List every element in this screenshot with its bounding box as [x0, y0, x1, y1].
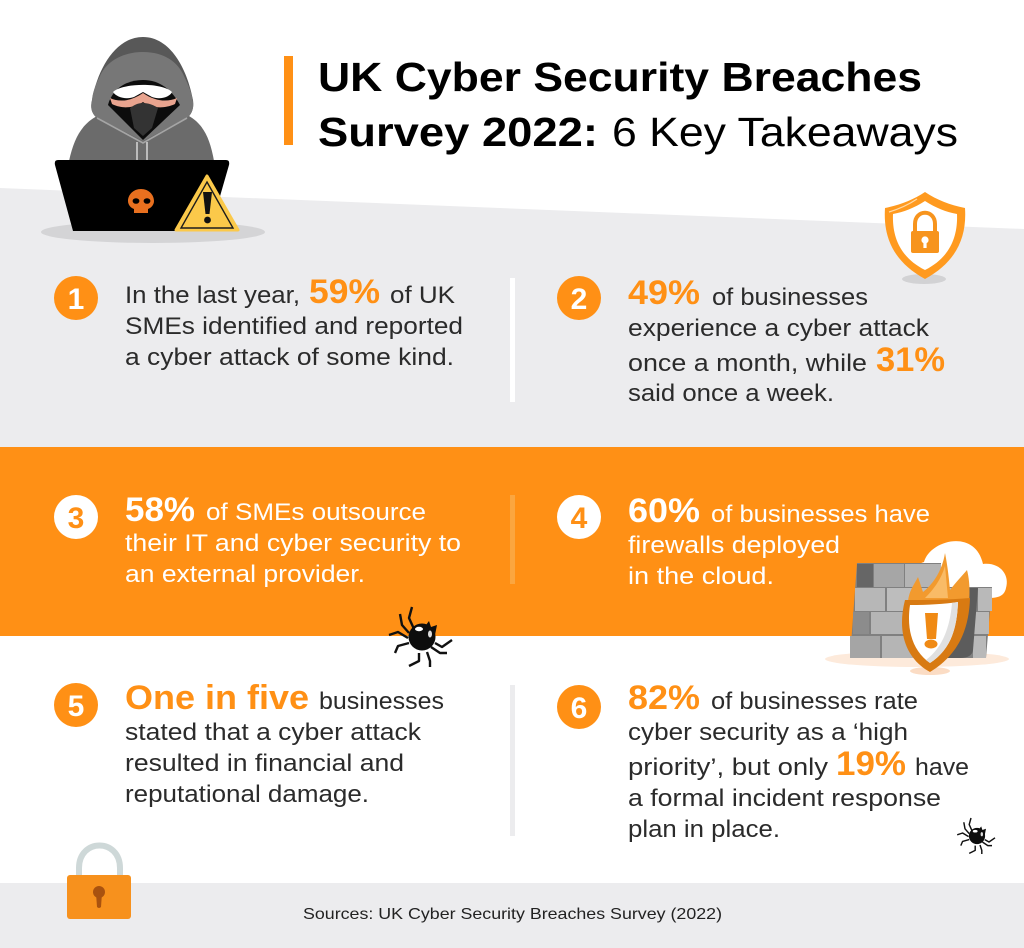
text: takeaway 6: cyber security as a ‘high: [628, 719, 908, 746]
text: takeaway 5: reputational damage.: [125, 781, 369, 808]
text: takeaway 1: a cyber attack of some kind.: [125, 344, 454, 371]
text: takeaway 4: in the cloud.: [628, 563, 774, 590]
source note: Sources: UK Cyber Security Breaches Survey (2022): [303, 906, 722, 923]
number badge 3: [54, 495, 98, 539]
text: takeaway 6: of businesses rate: [711, 688, 918, 715]
background: slanted grey band: [0, 188, 1024, 448]
number badge 2: 2: [571, 283, 587, 316]
text: takeaway 4: firewalls deployed: [628, 532, 840, 559]
text: takeaway 5: businesses: [319, 688, 444, 715]
text: takeaway 5: [125, 679, 444, 808]
number badge 4: [557, 495, 601, 539]
number badge 1: 1: [68, 283, 84, 316]
text: takeaway 2: [628, 274, 945, 407]
text: takeaway 2: experience a cyber attack: [628, 315, 930, 342]
title accent bar: [284, 56, 293, 145]
text: takeaway 4: [628, 492, 930, 590]
text: takeaway 2: 31%: [876, 341, 945, 379]
number badge 4: 4: [571, 502, 588, 535]
text: takeaway 3: [125, 491, 461, 588]
text: takeaway 3: 58%: [125, 491, 195, 529]
text: takeaway 6: 19%: [836, 745, 906, 783]
text: takeaway 6: [628, 679, 969, 843]
text: takeaway 5: One in five: [125, 679, 309, 717]
divider: panels 3 and 4: [510, 495, 515, 584]
icon: padlock: [67, 846, 131, 919]
text: takeaway 2: once a month, while: [628, 350, 867, 377]
panel: takeaway 2: [557, 274, 945, 407]
number badge 1: [54, 276, 98, 320]
text: takeaway 2: 49%: [628, 274, 700, 312]
text: takeaway 4: of businesses have: [711, 501, 930, 528]
text: takeaway 5: stated that a cyber attack: [125, 719, 422, 746]
number badge 5: 5: [68, 690, 84, 723]
text: takeaway 1: SMEs identified and reported: [125, 313, 463, 340]
number badge 5: [54, 683, 98, 727]
text: takeaway 6: priority’, but only: [628, 754, 828, 781]
text: takeaway 5: resulted in financial and: [125, 750, 404, 777]
background: orange band: [0, 447, 1024, 636]
divider: panels 5 and 6: [510, 685, 515, 836]
text: takeaway 3: an external provider.: [125, 561, 365, 588]
text: takeaway 6: have: [915, 754, 969, 781]
text: takeaway 1: In the last year,: [125, 282, 300, 309]
text: takeaway 3: their IT and cyber security to: [125, 530, 461, 557]
text: takeaway 3: of SMEs outsource: [206, 499, 426, 526]
background: footer band: [0, 883, 1024, 948]
panel: takeaway 3: [54, 491, 461, 588]
text: takeaway 6: a formal incident response: [628, 785, 941, 812]
title: UK Cyber Security Breaches: [318, 54, 922, 100]
text: takeaway 6: plan in place.: [628, 816, 780, 843]
number badge 3: 3: [68, 502, 84, 535]
title: [318, 54, 958, 155]
text: takeaway 1: of UK: [390, 282, 455, 309]
icon: hacker at laptop with warning sign: [41, 37, 265, 243]
text: takeaway 4: 60%: [628, 492, 700, 530]
text: takeaway 1: [125, 273, 463, 371]
text: takeaway 2: said once a week.: [628, 380, 834, 407]
text: takeaway 6: 82%: [628, 679, 700, 717]
icon: firewall with cloud and burning shield: [825, 541, 1009, 675]
text: takeaway 1: 59%: [309, 273, 380, 311]
icon: shield with padlock: [885, 192, 965, 284]
panel: takeaway 5: [54, 679, 444, 808]
number badge 6: 6: [571, 692, 587, 725]
panel: takeaway 4: [557, 492, 930, 590]
panel: takeaway 1: [54, 273, 463, 371]
icon: small spider: [957, 818, 995, 854]
number badge 2: [557, 276, 601, 320]
number badge 6: [557, 685, 601, 729]
panel: takeaway 6: [557, 679, 969, 843]
title: Survey 2022:: [318, 109, 598, 155]
divider: panels 1 and 2: [510, 278, 515, 402]
text: takeaway 2: of businesses: [712, 284, 868, 311]
title: 6 Key Takeaways: [612, 109, 958, 155]
icon: spider on band edge: [389, 607, 452, 667]
